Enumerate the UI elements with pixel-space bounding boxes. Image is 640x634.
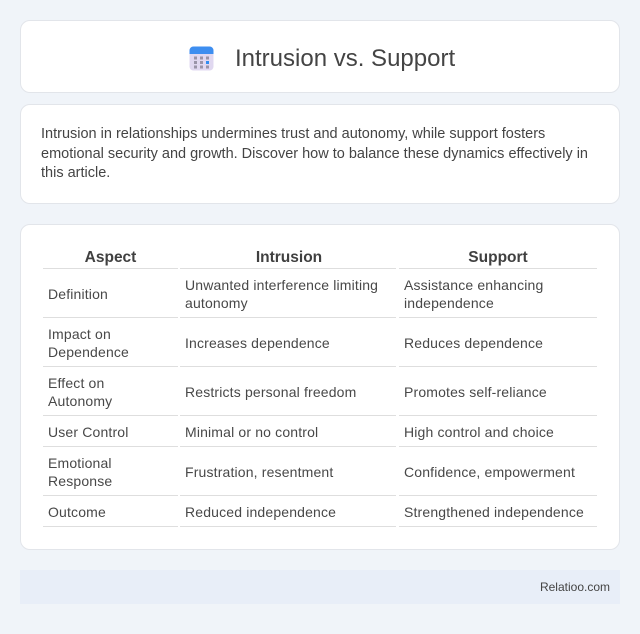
comparison table <box>43 249 597 527</box>
row: Emotional Response <box>48 455 575 489</box>
icon: calendar <box>190 46 214 70</box>
row: Impact on Dependence <box>48 326 543 360</box>
row: Outcome: Reduced independence <box>185 504 336 520</box>
title: Intrusion vs. Support <box>235 45 455 72</box>
row: User Control: High control and choice <box>404 424 554 440</box>
column headers: Aspect <box>85 249 136 266</box>
row: Outcome: Strengthened independence <box>404 504 584 520</box>
row: Definition: Unwanted interference limiting <box>185 277 378 293</box>
row: Definition: Assistance enhancing <box>404 277 543 293</box>
row: Definition: independence <box>404 295 494 311</box>
row: Impact on Dependence: Increases dependence <box>185 335 330 351</box>
row: Impact on Dependence: Reduces dependence <box>404 335 543 351</box>
row: Emotional Response: Response <box>48 473 112 489</box>
row: Impact on Dependence: Impact on <box>48 326 111 342</box>
row: User Control: Minimal or no control <box>185 424 318 440</box>
row: Definition: Definition <box>48 286 108 302</box>
row: Definition: autonomy <box>185 295 248 311</box>
column headers: Support <box>468 249 528 266</box>
row: Emotional Response: Confidence, empowerment <box>404 464 575 480</box>
text block: introduction: emotional security and growth. Discover how to balance these dynamics effectively in <box>41 146 588 162</box>
row: Definition <box>48 277 543 311</box>
row: Effect on Autonomy: Effect on <box>48 375 104 391</box>
row: Effect on Autonomy <box>48 375 547 409</box>
row: Effect on Autonomy: Autonomy <box>48 393 112 409</box>
row: Emotional Response: Emotional <box>48 455 112 471</box>
row: Emotional Response: Frustration, resentment <box>185 464 333 480</box>
footer <box>20 570 620 604</box>
row: Effect on Autonomy: Restricts personal freedom <box>185 384 356 400</box>
text block: introduction: this article. <box>41 165 110 181</box>
footer text: Relatioo.com <box>540 580 610 594</box>
text block: introduction <box>41 126 588 181</box>
column headers: Intrusion <box>256 249 322 266</box>
panel: comparison table <box>20 224 620 550</box>
row: Effect on Autonomy: Promotes self-reliance <box>404 384 547 400</box>
panel: title card <box>20 20 620 93</box>
row: Outcome <box>48 504 584 520</box>
row: User Control: User Control <box>48 424 128 440</box>
row: User Control <box>48 424 554 440</box>
column headers <box>85 249 528 266</box>
text block: introduction: Intrusion in relationships undermines trust and autonomy, while support fosters <box>41 126 545 142</box>
panel: introduction <box>20 104 620 204</box>
row: Impact on Dependence: Dependence <box>48 344 129 360</box>
row: Outcome: Outcome <box>48 504 106 520</box>
